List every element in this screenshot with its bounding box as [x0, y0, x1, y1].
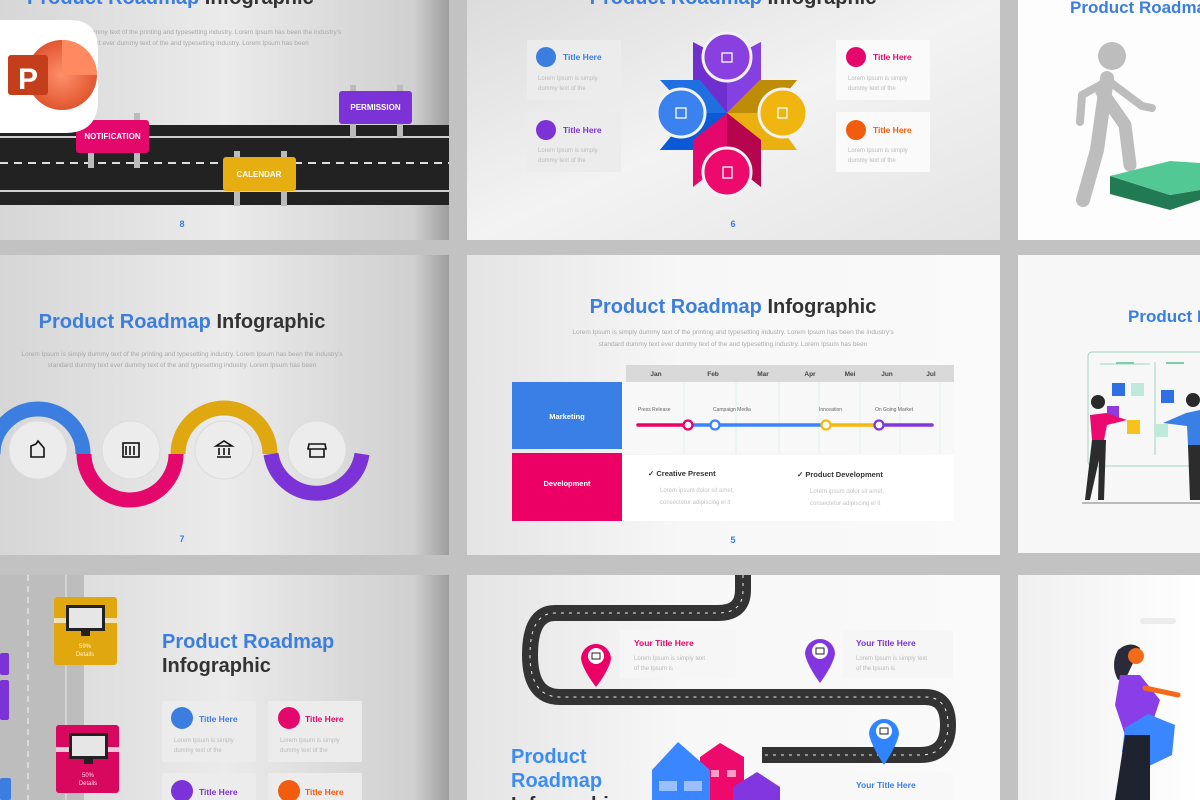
- panel: development details: ✓ Product Development: [797, 470, 883, 479]
- description text: Lorem Ipsum is simply dummy text of the printing and typesetting industry. Lorem Ipsum has been the industry's: [20, 29, 342, 36]
- card: your title 1: Lorem Ipsum is simply text: [634, 656, 705, 662]
- card: your title 1: Your Title Here: [634, 638, 694, 648]
- card: your title 3: [843, 772, 953, 800]
- card: right 2: dummy text of the: [848, 158, 896, 164]
- table: month header: Mei: [845, 371, 856, 378]
- table: month header: Jun: [881, 371, 893, 378]
- chart: marketing timeline: Campaign Media: [713, 407, 751, 413]
- card: right 1: dummy text of the: [848, 86, 896, 92]
- table: month header: Apr: [804, 371, 816, 378]
- chart: wave arcs: [0, 408, 362, 500]
- page number 5: 5: [730, 535, 736, 545]
- card: your title 1: of the Ipsum is: [634, 666, 673, 672]
- card: title 1: [162, 701, 256, 762]
- page number 7: 7: [179, 534, 185, 544]
- slide: woman with box (bottom-right): [1018, 575, 1200, 800]
- card: left 2: Title Here: [563, 125, 602, 135]
- card: 59% details: Details: [76, 652, 94, 658]
- table: month header: Jan: [650, 371, 662, 378]
- description text: standard dummy text ever dummy text of the and typesetting industry. Lorem Ipsum has been: [599, 341, 868, 348]
- icon: pin pink: [581, 644, 611, 687]
- row: marketing: Marketing: [549, 412, 585, 421]
- description text: standard dummy text ever dummy text of the and typesetting industry. Lorem Ipsum has been: [40, 40, 309, 47]
- card: 59% details: 59%: [79, 644, 92, 650]
- card: title 3: Title Here: [199, 787, 238, 797]
- slide: timeline table (center): [467, 255, 1000, 555]
- icon: green step: [1110, 161, 1200, 210]
- road: [0, 125, 449, 205]
- card: right 2: Title Here: [873, 125, 912, 135]
- sign: calendar: [223, 151, 296, 206]
- slide: wave steps (middle-left): [0, 255, 449, 555]
- title: center: Product Roadmap Infographic: [590, 296, 876, 318]
- card: your title 1: [620, 630, 736, 678]
- illustration: woman carrying box: [1114, 644, 1178, 800]
- card: 50% details: Details: [79, 781, 97, 787]
- panel: development details: Lorem ipsum dolor sit amet,: [660, 488, 734, 494]
- slide: flower diagram (top-middle): [467, 0, 1000, 240]
- icon: PowerPoint logo: P: [18, 63, 38, 96]
- page number 6: 6: [730, 219, 736, 229]
- card: left 1: [527, 40, 621, 100]
- description text: Lorem Ipsum is simply dummy text of the printing and typesetting industry. Lorem Ipsum has been the industry's: [572, 329, 894, 336]
- icon: pin blue: [869, 719, 899, 765]
- card: title 2: [268, 701, 362, 762]
- row: marketing: [512, 382, 622, 449]
- card: title 2: Lorem Ipsum is simply: [280, 738, 340, 744]
- card: your title 2: of the Ipsum is: [856, 666, 895, 672]
- card: title 1: Title Here: [199, 714, 238, 724]
- description text: [572, 329, 894, 348]
- icons: step circles: [9, 421, 346, 479]
- description text: [20, 29, 342, 47]
- panel: development details: Lorem ipsum dolor sit amet,: [810, 489, 884, 495]
- chart: four-petal flower: [657, 33, 807, 196]
- card: right 1: Title Here: [873, 52, 912, 62]
- card: right 2: [836, 112, 930, 172]
- table: month header: [626, 365, 954, 382]
- panel: development details: ✓ Creative Present: [648, 469, 716, 478]
- table: month header: Jul: [926, 371, 936, 378]
- slide: road signs (top-left): [0, 0, 449, 240]
- card: title 1: dummy text of the: [174, 748, 222, 754]
- icon: PowerPoint logo: [0, 20, 98, 133]
- sign: permission: [339, 85, 412, 137]
- slide: walking figure (top-right): [1018, 0, 1200, 240]
- card: title 3: [162, 773, 256, 800]
- card: 59% details: [54, 597, 117, 665]
- slide: winding road (bottom-middle): [467, 575, 1000, 800]
- row: development: [512, 453, 622, 521]
- page number 8: 8: [179, 219, 185, 229]
- sign: notification: [76, 113, 149, 168]
- chart: marketing timeline: Innovation: [819, 407, 842, 413]
- description text: Lorem Ipsum is simply dummy text of the printing and typesetting industry. Lorem Ipsum has been the industry's: [21, 351, 343, 358]
- card: title 4: [268, 773, 362, 800]
- table: month header: Feb: [707, 371, 719, 378]
- chart: marketing timeline: On Going Market: [875, 407, 914, 413]
- sign: permission: PERMISSION: [350, 103, 401, 112]
- title: middle-left: Product Roadmap Infographic: [39, 311, 325, 333]
- illustration: buildings: [652, 742, 780, 800]
- panel: development details: consectetur adipiscing el it: [810, 501, 881, 507]
- card: left 2: Lorem Ipsum is simply: [538, 148, 598, 154]
- icon: pin purple: [805, 639, 835, 683]
- card: title 2: Title Here: [305, 714, 344, 724]
- card: left 2: dummy text of the: [538, 158, 586, 164]
- description text: [21, 351, 343, 369]
- row: development: Development: [543, 479, 591, 488]
- pill decoration: [1140, 618, 1176, 624]
- slide: road map route (bottom-left): [0, 575, 449, 800]
- sign: calendar: CALENDAR: [237, 170, 282, 179]
- card: 50% details: 50%: [82, 773, 95, 779]
- card: your title 2: Lorem Ipsum is simply text: [856, 656, 927, 662]
- card: left 2: [527, 112, 621, 172]
- title: bottom-middle: Roadmap: [511, 770, 602, 792]
- card: right 1: [836, 40, 930, 100]
- title: bottom-middle: Product: [511, 746, 587, 768]
- card: left 1: Title Here: [563, 52, 602, 62]
- road: winding: [530, 575, 948, 755]
- card: 50% details: [56, 725, 119, 793]
- chart: marketing timeline: Press Release: [638, 407, 671, 413]
- card: title 2: dummy text of the: [280, 748, 328, 754]
- card: title 4: Title Here: [305, 787, 344, 797]
- card: your title 3: Your Title Here: [856, 780, 916, 790]
- title: bottom-left: Product Roadmap: [162, 631, 334, 653]
- card: title 1: Lorem Ipsum is simply: [174, 738, 234, 744]
- card: your title 2: [843, 630, 953, 678]
- panel: development details: [622, 455, 954, 521]
- sign: notification: NOTIFICATION: [84, 132, 141, 141]
- card: left 1: Lorem Ipsum is simply: [538, 76, 598, 82]
- title: bottom-middle: [511, 746, 620, 800]
- icon: walking person: [1080, 42, 1152, 200]
- card: right 1: Lorem Ipsum is simply: [848, 76, 908, 82]
- card: right 2: Lorem Ipsum is simply: [848, 148, 908, 154]
- card: your title 2: Your Title Here: [856, 638, 916, 648]
- table: month header: Mar: [757, 371, 769, 378]
- description text: standard dummy text ever dummy text of the and typesetting industry. Lorem Ipsum has been: [48, 362, 317, 369]
- slide: kanban board (middle-right): [1018, 255, 1200, 553]
- panel: development details: consectetur adipiscing el it: [660, 500, 731, 506]
- slide: road map route (bottom-left): Infographic: [162, 655, 271, 677]
- card: left 1: dummy text of the: [538, 86, 586, 92]
- chart: marketing timeline: [622, 382, 954, 454]
- illustration: board with people: [1082, 352, 1200, 503]
